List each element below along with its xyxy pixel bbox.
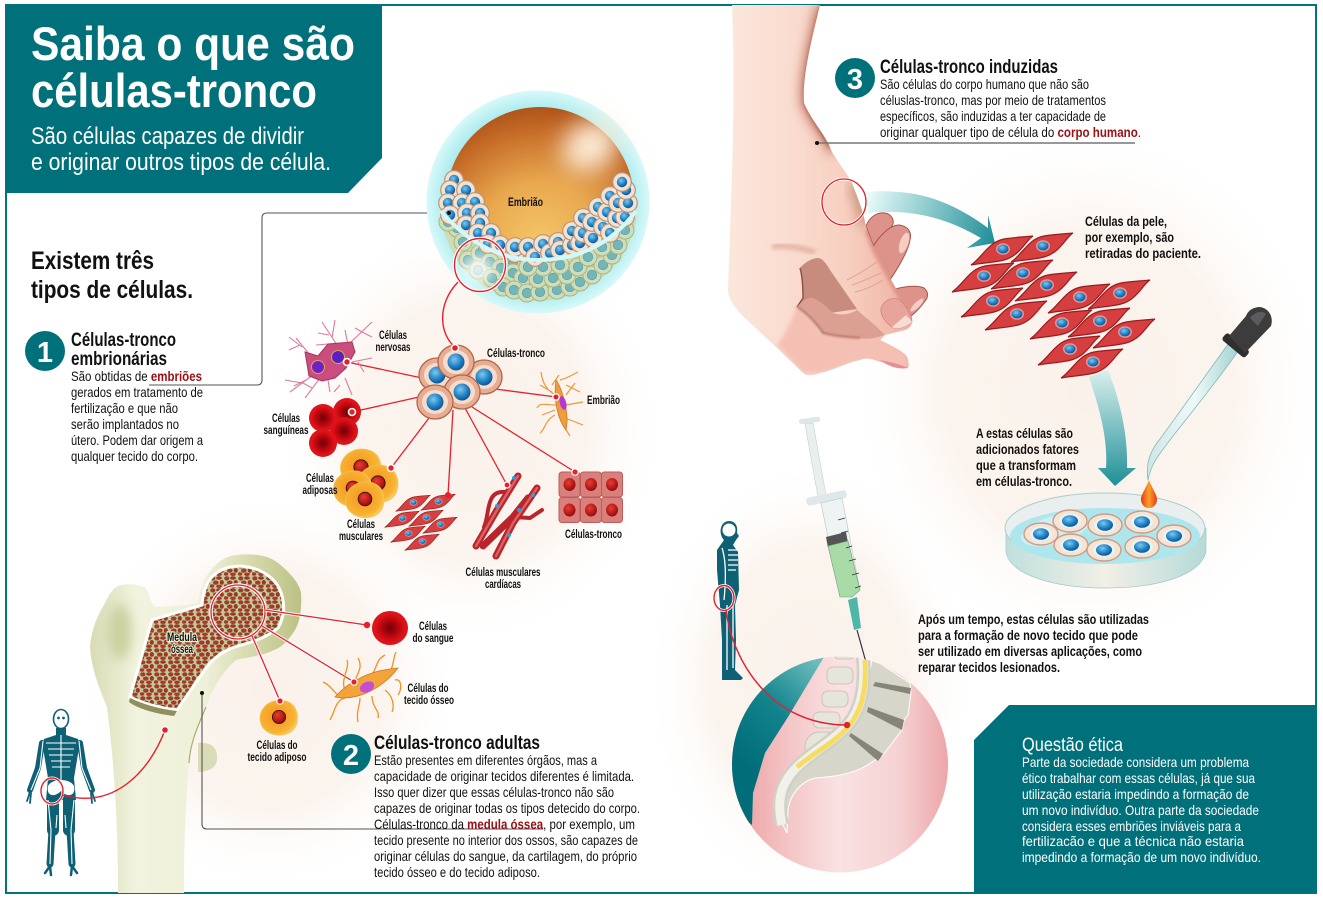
hand shading: [772, 5, 912, 373]
icon: orange drop: [1141, 480, 1157, 508]
label: células musculares: musculares: [339, 531, 383, 543]
label: células do tecido ósseo: [404, 683, 454, 707]
badge 3: [835, 58, 875, 98]
diagram: blood cells: [309, 398, 361, 457]
section 3 connector: [815, 141, 1135, 145]
section 2 text: Estão presentes em diferentes órgãos, mas a: [374, 752, 597, 768]
text: células da pele: retiradas do paciente.: [1085, 245, 1201, 261]
section 1 heading: Células-tronco: [71, 330, 176, 351]
text: após um tempo: para a formação de novo tecido que pode: [918, 627, 1138, 643]
section 1: [25, 330, 203, 464]
text: após um tempo: reparar tecidos lesionados.: [918, 659, 1060, 675]
section 2 text: capazes de originar todas os tipos detecido do corpo.: [374, 800, 640, 816]
highlight: [463, 256, 493, 282]
title: Saiba o que são: [31, 17, 355, 70]
heading: existem três tipos: Existem três: [31, 247, 154, 275]
illustration: petri dish: [1005, 493, 1206, 588]
cells in dish: [1024, 510, 1191, 561]
label: células adiposas: Células: [306, 473, 334, 485]
diagram: stem cell cluster: [417, 344, 502, 419]
section 3 text: originar qualquer tipo de célula do corpo humano.: [880, 124, 1141, 140]
label: medula óssea: óssea: [171, 644, 193, 656]
title: [31, 17, 355, 117]
section 1 text: [71, 368, 203, 464]
section 2 text: tecido presente no interior dos ossos, são capazes de: [374, 832, 638, 848]
connector end dot: [447, 211, 451, 215]
hand base: [728, 5, 912, 375]
panel: title header: [6, 5, 382, 193]
label: células musculares: Células: [347, 519, 375, 531]
lines from stem cells: [347, 362, 575, 495]
heading: existem três tipos: tipos de células.: [31, 276, 193, 304]
label: células sanguíneas: sanguíneas: [264, 425, 308, 437]
label: células musculares cardíacas: [466, 567, 540, 591]
callout: skin biopsy circle: [822, 179, 866, 225]
diagram: skin cells: [952, 233, 1155, 378]
icon: human skeleton front: [27, 710, 95, 875]
label: células-tronco: Células-tronco: [487, 348, 545, 360]
section 2 text: Células-tronco da medula óssea, por exemplo, um: [374, 816, 635, 832]
diagram: neuron cells: [285, 320, 372, 398]
lower cell layer: [439, 210, 637, 302]
panel text: impedindo a formação de um novo indivíduo.: [1022, 849, 1261, 865]
arrow: cells to dish: [1089, 370, 1136, 486]
label: células nervosas: Células: [379, 330, 407, 342]
section 1 text: São obtidas de embriões: [71, 368, 202, 384]
text: células da pele: [1085, 213, 1201, 261]
icon: human skeleton side: [717, 521, 743, 680]
section 2 text: [374, 752, 640, 880]
panel text: utilização estaria impedindo a formação de: [1022, 786, 1249, 802]
diagram: nerve embryo cell: [537, 372, 583, 436]
label: Embrião: Embrião: [508, 197, 543, 209]
diagram: muscle cells: [385, 492, 457, 550]
thumb nail: [881, 299, 912, 328]
subtitle: e originar outros tipos de célula.: [31, 149, 331, 176]
panel text: Parte da sociedade considera um problema: [1022, 754, 1249, 770]
label: células sanguíneas: Células: [272, 413, 300, 425]
text: após um tempo: [918, 611, 1149, 675]
section 1 text: serão implantados no: [71, 416, 179, 432]
label: células do tecido adiposo: [248, 740, 306, 764]
lines from marrow: [252, 610, 367, 701]
section 1 text: útero. Podem dar origem a: [71, 432, 203, 448]
section 3 text: São células do corpo humano que não são: [880, 76, 1089, 92]
section 3 text: céluslas-tronco, mas por meio de tratamentos: [880, 92, 1106, 108]
badge 1: [25, 331, 65, 371]
section 2 text: originar células do sangue, da cartilagem, do próprio: [374, 848, 637, 864]
label: células-tronco: Células-tronco: [565, 529, 622, 541]
label: medula óssea: [167, 632, 197, 656]
subtitle: São células capazes de dividir: [31, 123, 304, 150]
section 1 text: gerados em tratamento de: [71, 384, 203, 400]
subtitle: [31, 123, 331, 176]
text: após um tempo: ser utilizado em diversas aplicações, como: [918, 643, 1142, 659]
section 2 text: tecido ósseo e do tecido adiposo.: [374, 864, 540, 880]
label: células nervosas: [376, 330, 410, 354]
section 3: [835, 57, 1141, 140]
vertebra discs: [849, 682, 911, 761]
spinal canal: [780, 657, 864, 825]
label: células do tecido ósseo: Células do: [408, 683, 448, 695]
label: células do sangue: Células: [419, 621, 447, 633]
text: células da pele: por exemplo, são: [1085, 229, 1174, 245]
section 2 text: capacidade de originar tecidos diferentes é limitada.: [374, 768, 634, 784]
section 3 text: [880, 76, 1141, 140]
callout: hip to bone: [41, 727, 168, 804]
thumb wrinkles: [847, 262, 883, 292]
panel text: ético trabalhar com essas células, já que sua: [1022, 770, 1255, 786]
vertebrae spinous: [805, 653, 853, 752]
text: a estas células: que a transformam: [976, 457, 1076, 473]
badge 2: 2: [343, 740, 359, 772]
panel heading: Questão ética: [1022, 735, 1123, 756]
label: células adiposas: adiposas: [302, 485, 338, 497]
bone marrow: [130, 566, 284, 710]
section 2: [331, 733, 640, 880]
heading: existem três tipos: [31, 247, 193, 304]
diagram: fat cells: [334, 449, 398, 518]
text: a estas células: A estas células são: [976, 425, 1073, 441]
panel text: um novo indivíduo. Outra parte da sociedade: [1022, 802, 1259, 818]
palm cavity: [797, 258, 857, 313]
badge 1: 1: [37, 337, 53, 369]
section 1 heading: embrionárias: [71, 349, 167, 370]
text: a estas células: em células-tronco.: [976, 473, 1072, 489]
illustration: embryo sphere: [426, 90, 650, 314]
label: medula óssea: Medula: [167, 632, 197, 644]
text: a estas células: adicionados fatores: [976, 441, 1079, 457]
text: células da pele: Células da pele,: [1085, 213, 1167, 229]
label: células do tecido adiposo: tecido adiposo: [248, 752, 306, 764]
diagram: blood cell: [364, 611, 408, 645]
fingers behind: [866, 213, 928, 316]
label: embrião: Embrião: [587, 395, 620, 407]
detail circle: [211, 585, 265, 639]
label: células nervosas: nervosas: [376, 342, 410, 354]
badge 2: [331, 734, 371, 774]
label: células musculares cardíacas: Células musculares: [466, 567, 540, 579]
section 2 text: Isso quer dizer que essas células-tronco não são: [374, 784, 614, 800]
blue cell crescent: [439, 171, 637, 266]
label: células sanguíneas: [264, 413, 308, 437]
illustration: dropper: [1147, 307, 1272, 480]
callout: back to spine: [714, 586, 850, 728]
panel text: considera esses embriões inviáveis para a: [1022, 818, 1241, 834]
section 2 heading: Células-tronco adultas: [374, 733, 540, 754]
diagram: cardiac muscle cells: [476, 476, 542, 556]
spine bone: [777, 658, 911, 833]
connector: embriões to embryo: [149, 213, 449, 385]
label: células do tecido adiposo: Células do: [256, 740, 298, 752]
panel: ethics box: [974, 705, 1316, 893]
section 3 heading: Células-tronco induzidas: [880, 57, 1058, 78]
section 1 heading: [71, 330, 176, 370]
diagram: bone cell: [323, 652, 401, 722]
section 3 text: específicos, são induzidas a ter capacidade de: [880, 108, 1106, 124]
magnifier circle and curve: [443, 238, 506, 347]
connector: medula to bone: [200, 691, 543, 829]
label: células musculares cardíacas: cardíacas: [485, 579, 521, 591]
label: células do sangue: do sangue: [412, 633, 454, 645]
diagram: stem cell grid: [559, 469, 622, 522]
label: células do tecido ósseo: tecido ósseo: [404, 695, 454, 707]
arrow: skin to cells: [866, 191, 995, 248]
illustration: hand: [728, 5, 928, 375]
panel text: [1022, 754, 1261, 865]
panel text: fertilizacão e que a técnica não estaria: [1022, 833, 1244, 849]
label: células adiposas: [302, 473, 338, 497]
text: após um tempo: Após um tempo, estas células são utilizadas: [918, 611, 1149, 627]
text: a estas células: [976, 425, 1079, 489]
label: células musculares: [339, 519, 383, 543]
badge 3: 3: [847, 64, 863, 96]
illustration: syringe: [799, 416, 869, 673]
diagram: fat cell: [260, 698, 297, 735]
illustration: spine section: [732, 656, 948, 872]
curled finger: [797, 298, 885, 339]
title: células-tronco: [31, 64, 317, 117]
label: células do sangue: [412, 621, 454, 645]
illustration: femur bone: [90, 554, 301, 893]
section 1 text: fertilização e que não: [71, 400, 178, 416]
section 1 text: qualquer tecido do corpo.: [71, 448, 198, 464]
